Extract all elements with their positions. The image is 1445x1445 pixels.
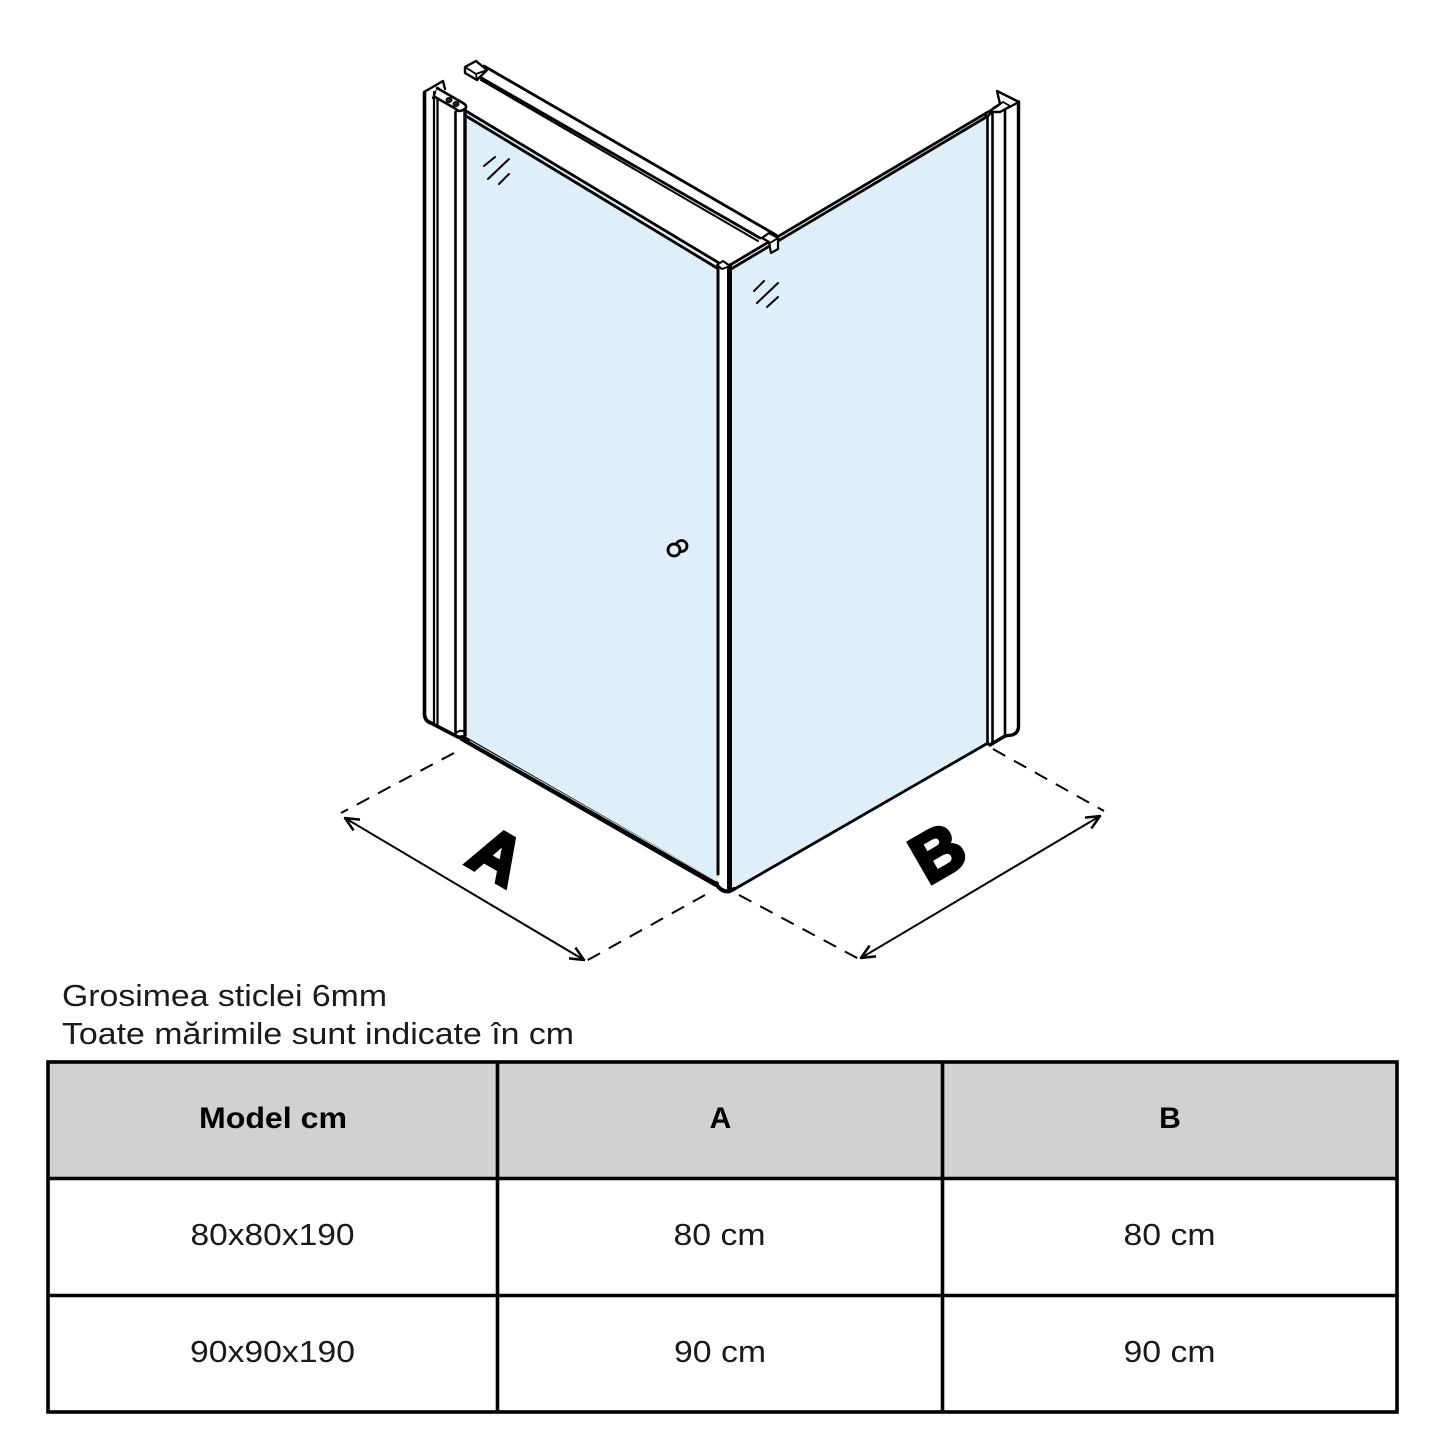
note text: Toate mărimile sunt indicate în cm <box>62 1017 574 1051</box>
panel: right glass panel <box>731 115 988 890</box>
label A: A <box>457 811 537 901</box>
door knob <box>668 540 687 556</box>
panel: left glass door <box>465 110 718 881</box>
row 80: 80x80x190 <box>190 1218 354 1252</box>
label B: B <box>898 808 978 898</box>
row 80 <box>190 1218 1216 1252</box>
top rail of right glass <box>730 112 988 269</box>
row 90 <box>190 1335 1216 1369</box>
top rail of left glass <box>466 111 719 268</box>
shower enclosure drawing <box>424 61 1019 891</box>
right wall profile <box>984 91 1019 745</box>
row 80: 80 cm <box>674 1218 766 1252</box>
table header labels: A <box>710 1102 731 1135</box>
table header labels <box>199 1102 1181 1135</box>
row 80: 80 cm <box>1124 1218 1216 1252</box>
dashed extension lines B <box>739 749 1104 959</box>
left wall profile <box>424 81 466 738</box>
dimension A <box>341 753 705 961</box>
table header background <box>48 1063 1397 1178</box>
dashed extension lines A <box>341 753 705 961</box>
dimensions table <box>48 1062 1397 1412</box>
bottom seal of left glass <box>462 738 716 884</box>
corner profile <box>717 261 730 888</box>
row 90: 90 cm <box>1124 1335 1216 1369</box>
dimension B <box>739 749 1104 959</box>
table grid <box>48 1062 1397 1412</box>
glass reflection marks: right <box>754 281 778 307</box>
row 90: 90 cm <box>674 1335 766 1369</box>
bottom corner foot <box>716 884 734 891</box>
row 90: 90x90x190 <box>190 1335 355 1369</box>
note text: Grosimea sticlei 6mm <box>62 979 387 1013</box>
bottom line of right glass <box>733 743 988 890</box>
dimension arrow B <box>861 816 1100 958</box>
dimension arrow A <box>345 818 584 960</box>
note text <box>62 979 574 1051</box>
table header labels: Model cm <box>199 1102 347 1135</box>
glass reflection marks: left <box>484 157 509 184</box>
wall bar with brackets <box>465 61 778 253</box>
table header labels: B <box>1159 1102 1181 1135</box>
